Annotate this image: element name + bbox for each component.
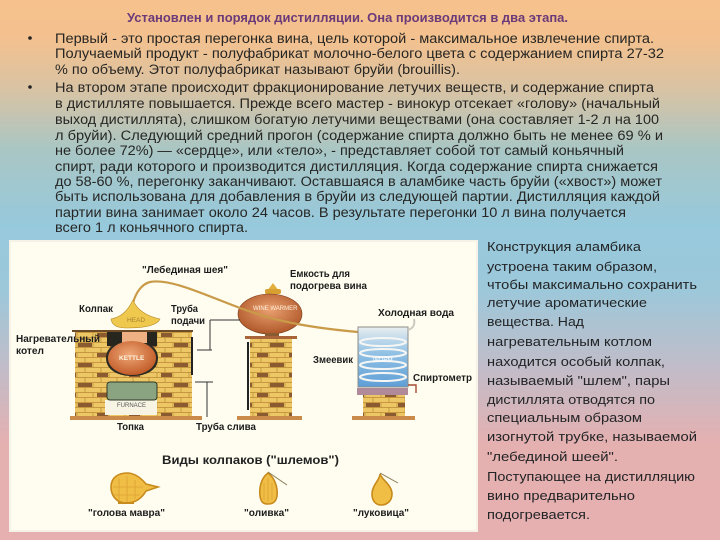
text block: second stage bbox=[28, 80, 663, 235]
text block: second stage: всего 1 л коньячного спирта. bbox=[55, 220, 248, 235]
feed and drain pipes bbox=[195, 320, 240, 417]
text block: first stage: % по объему. Этот полуфабрикат называют бруйи (brouillis). bbox=[55, 62, 460, 77]
text block: second stage: не более 72%) — «сердце», или «тело», - представляет собой тот самый коньячный bbox=[55, 143, 624, 158]
text block: second stage: быть использована для добавления в бруйи из следующей партии. Дистилляция каждой bbox=[55, 189, 660, 204]
head and swan neck bbox=[111, 281, 358, 332]
icon: onion helmet: "луковица" bbox=[353, 507, 409, 519]
text block: alembic description bbox=[487, 239, 697, 522]
diagram labels: Нагревательный bbox=[16, 333, 100, 345]
text block: alembic description: называемый "шлем", пары bbox=[487, 373, 670, 388]
text block: second stage: выход дистиллята), слишком богатую летучими веществами (она составляет 1-2 л на 100 bbox=[55, 112, 659, 127]
text block: alembic description: Поступающее на дистилляцию bbox=[487, 469, 695, 484]
text block: alembic description: летучие ароматические bbox=[487, 295, 647, 310]
diagram labels: Труба слива bbox=[196, 421, 256, 433]
text block: alembic description: чтобы максимально сохранить bbox=[487, 277, 697, 292]
diagram labels: Колпак bbox=[79, 303, 114, 315]
icon: moor head helmet: "голова мавра" bbox=[88, 507, 165, 519]
title: Установлен и порядок дистилляции. Она производится в два этапа. bbox=[127, 11, 568, 25]
text block: alembic description: нагревательным котлом bbox=[487, 334, 652, 349]
diagram labels: Змеевик bbox=[313, 354, 354, 366]
furnace with kettle bbox=[70, 330, 202, 420]
diagram labels: Спиртометр bbox=[413, 372, 472, 384]
text block: alembic description: изогнутой трубке, называемой bbox=[487, 429, 697, 444]
diagram labels: Емкость для bbox=[290, 268, 350, 280]
text block: alembic description: дистиллята отводятся по bbox=[487, 392, 655, 407]
bullet bbox=[28, 85, 32, 89]
condenser: WORM bbox=[373, 358, 393, 364]
heading: helmet types: Виды колпаков ("шлемов") bbox=[162, 455, 339, 467]
icon: olive helmet: "оливка" bbox=[244, 507, 289, 519]
diagram labels: Топка bbox=[117, 421, 144, 433]
bullet bbox=[28, 36, 32, 40]
text block: alembic description: специальным образом bbox=[487, 410, 642, 425]
grate label: FURNACE bbox=[117, 403, 146, 409]
icon: moor head helmet bbox=[88, 473, 165, 519]
text block: first stage: Получаемый продукт - полуфабрикат молочно-белого цвета с содержанием спирта 27-32 bbox=[55, 46, 664, 61]
diagram labels: котел bbox=[16, 345, 44, 357]
condenser bbox=[352, 319, 416, 420]
diagram labels: подачи bbox=[171, 315, 205, 327]
kettle: KETTLE bbox=[119, 355, 145, 362]
stand bricks bbox=[237, 336, 302, 420]
diagram labels: Холодная вода bbox=[378, 307, 454, 319]
text block: alembic description: находится особый колпак, bbox=[487, 354, 665, 369]
text block: alembic description: "лебединой шеей". bbox=[487, 449, 618, 464]
text block: alembic description: вещества. Над bbox=[487, 314, 584, 329]
text block: alembic description: подогревается. bbox=[487, 507, 590, 522]
wine warmer: WINE WARMER bbox=[253, 306, 298, 312]
icon: olive helmet bbox=[244, 472, 289, 519]
text block: second stage: до 58-60 %, перегонку заканчивают. Оставшаяся в аламбике часть бруйи («хвост») может bbox=[55, 174, 662, 189]
wine warmer bbox=[238, 283, 302, 337]
text block: second stage: партии вина занимает около 24 часов. В результате перегонки 10 л вина получается bbox=[55, 205, 626, 220]
panel: alembic diagram bbox=[10, 241, 477, 531]
text block: alembic description: Конструкция аламбика bbox=[487, 239, 642, 254]
diagram labels bbox=[16, 268, 472, 433]
text block: alembic description: вино предварительно bbox=[487, 488, 635, 503]
text block: second stage: спирт, ради которого и производится дистилляция. Когда содержание спирта снижается bbox=[55, 159, 658, 174]
text block: second stage: л бруйи). Следующий средний прогон (содержание спирта должно быть не менее 69 % и bbox=[55, 128, 663, 143]
icon: onion helmet bbox=[353, 473, 409, 519]
diagram labels: подогрева вина bbox=[290, 280, 367, 292]
text block: second stage: На втором этапе происходит фракционирование летучих веществ, и содержание спирта bbox=[55, 80, 655, 95]
text block: first stage bbox=[28, 31, 664, 77]
text block: second stage: в дистилляте повышается. Прежде всего мастер - винокур отсекает «голову» (начальный bbox=[55, 96, 660, 111]
diagram labels: Труба bbox=[171, 303, 198, 315]
head and swan neck: HEAD bbox=[127, 317, 145, 324]
text block: first stage: Первый - это простая перегонка вина, цель которой - максимальное извлечение спирта. bbox=[55, 31, 654, 46]
label: swan neck: "Лебединая шея" bbox=[142, 264, 228, 276]
text block: alembic description: устроена таким образом, bbox=[487, 259, 657, 274]
